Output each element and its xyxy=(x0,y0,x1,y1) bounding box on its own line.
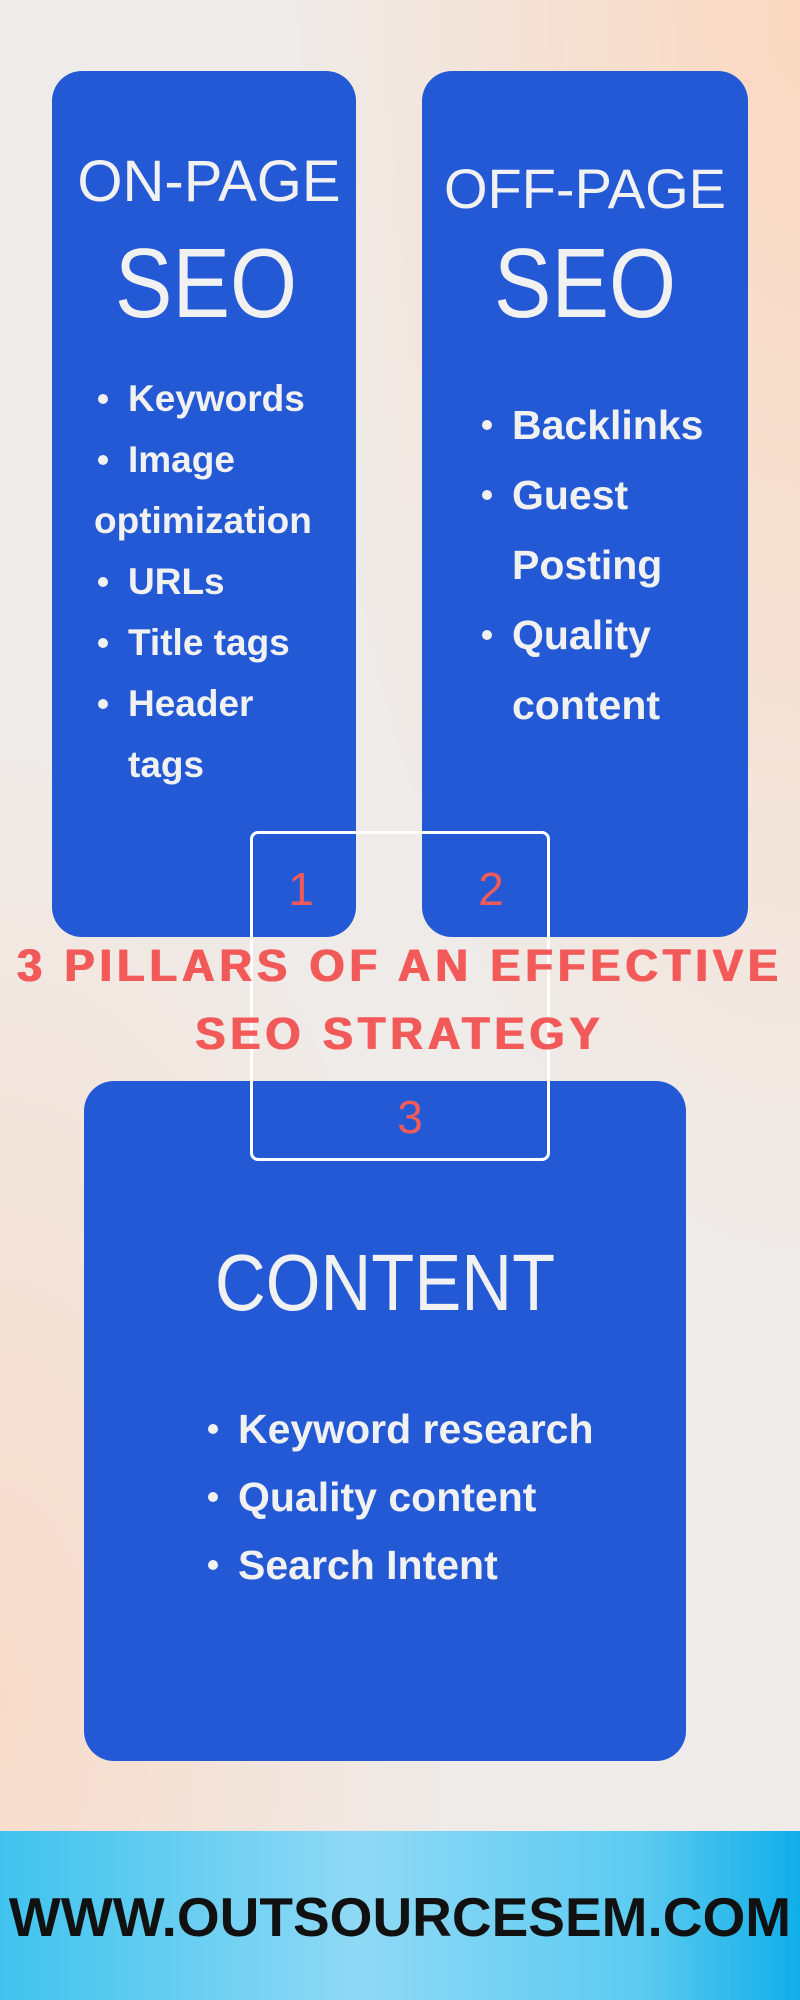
panel: off-page SEO xyxy=(422,71,748,937)
title xyxy=(17,940,783,1059)
list: off-page items: Backlinks xyxy=(512,402,703,448)
heading: SEO: SEO xyxy=(115,228,297,338)
list: on-page items xyxy=(94,378,312,785)
heading: on-page: ON-PAGE xyxy=(77,149,341,214)
list: on-page items: Keywords xyxy=(128,378,305,419)
list: content items: Search Intent xyxy=(238,1542,498,1588)
list: off-page items: Guest xyxy=(512,472,628,518)
list: off-page items xyxy=(482,402,703,728)
number 3: 3 xyxy=(397,1091,423,1143)
footer xyxy=(0,1831,800,2000)
list: on-page items: tags xyxy=(128,744,204,785)
list: off-page items: Posting xyxy=(512,542,662,588)
number 2: 2 xyxy=(478,863,504,915)
list: content items: Quality content xyxy=(238,1474,536,1520)
panel: on-page SEO xyxy=(52,71,356,937)
list: off-page items: content xyxy=(512,682,660,728)
list: on-page items: optimization xyxy=(94,500,312,541)
panel: content xyxy=(84,1081,686,1761)
center frame xyxy=(250,831,550,1161)
list: on-page items: Image xyxy=(128,439,235,480)
footer url: WWW.OUTSOURCESEM.COM xyxy=(9,1886,791,1948)
title: 3 PILLARS OF AN EFFECTIVE xyxy=(17,940,783,991)
title: SEO STRATEGY xyxy=(195,1008,605,1059)
heading: SEO: SEO xyxy=(494,228,676,338)
heading: content: CONTENT xyxy=(215,1238,555,1327)
list: content items: Keyword research xyxy=(238,1406,594,1452)
list: off-page items: Quality xyxy=(512,612,651,658)
list: content items xyxy=(208,1406,594,1588)
number 1: 1 xyxy=(288,863,314,915)
list: on-page items: Header xyxy=(128,683,253,724)
list: on-page items: Title tags xyxy=(128,622,290,663)
list: on-page items: URLs xyxy=(128,561,225,602)
heading: off-page: OFF-PAGE xyxy=(444,157,726,220)
